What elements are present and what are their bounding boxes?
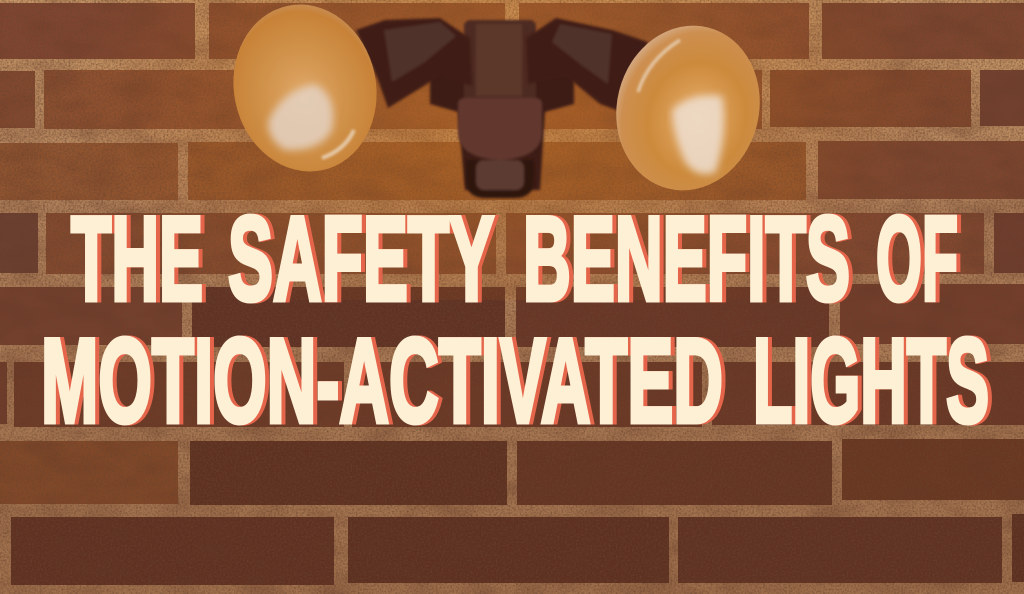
row 4 bricks [0, 213, 1024, 274]
motion sensor head [458, 98, 542, 198]
title line 1: THE [71, 192, 203, 326]
row 7 bricks [0, 439, 1024, 505]
fixture back plate [430, 20, 574, 190]
left flood lamp [218, 0, 392, 185]
row 1 bricks [0, 3, 1024, 59]
row 8 bricks [11, 514, 1024, 585]
row 2 bricks [0, 70, 1024, 129]
motion-activated light fixture [218, 0, 777, 206]
title [41, 192, 989, 448]
left lamp arm [356, 18, 472, 108]
title line 1: SAFETY [228, 192, 494, 326]
row 3 bricks [0, 141, 1024, 200]
row 5 bricks [0, 284, 1024, 347]
right lamp arm [526, 18, 648, 112]
right flood lamp [599, 10, 777, 206]
title line 1 [71, 192, 958, 326]
row 6 bricks [0, 362, 1024, 427]
warm light glow [0, 0, 1024, 300]
